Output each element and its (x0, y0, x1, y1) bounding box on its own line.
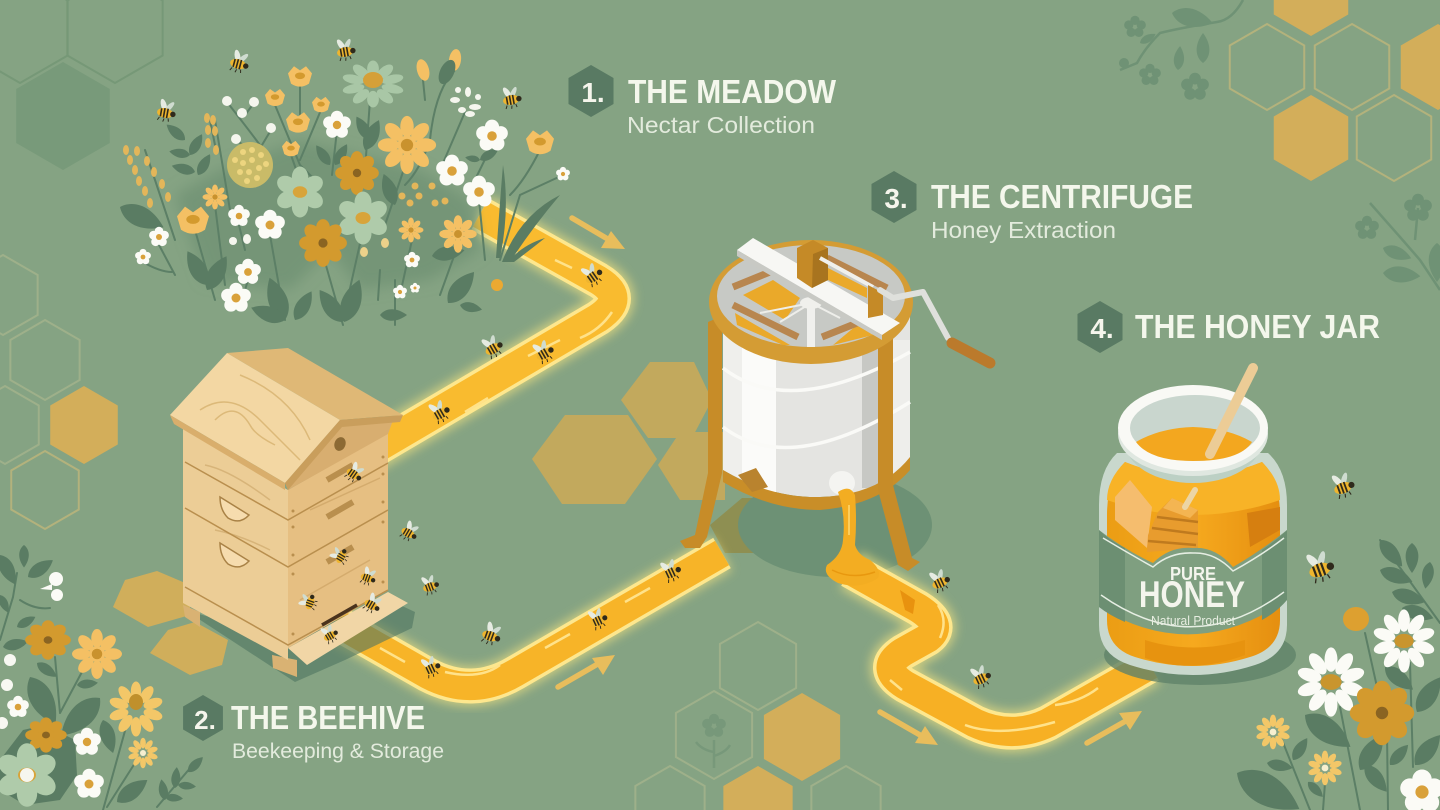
bottom left floral cluster (0, 545, 206, 810)
bar pivot block (797, 240, 883, 318)
arrow: stream direction 1 (572, 218, 625, 249)
badge 4: 4. (1090, 313, 1114, 344)
meadow flower patch (116, 48, 570, 327)
title: the centrifuge: THE CENTRIFUGE (931, 178, 1193, 215)
right cluster flower heads (1343, 607, 1369, 631)
meadow: grass blades over stream (502, 195, 560, 262)
meadow: leaves (116, 114, 560, 327)
hive box seams (185, 462, 388, 645)
honey stream: centrifuge to jar (850, 570, 1150, 732)
honey surface (1136, 427, 1252, 461)
jar honey (1107, 462, 1280, 666)
label text: honey: HONEY (1139, 574, 1245, 615)
honeycomb: bottom centre (635, 622, 881, 810)
left cluster white blossom (40, 572, 63, 601)
hive screws (292, 456, 384, 636)
centrifuge drum (723, 300, 910, 510)
badge 1: 1. (581, 77, 605, 108)
honeycomb: centre floor hexagons (532, 362, 798, 553)
jar label (1099, 530, 1287, 634)
honey pour (826, 489, 879, 586)
meadow: pale buds (360, 238, 389, 257)
hive legs (183, 605, 297, 677)
meadow: background grass (175, 140, 480, 290)
subtitle: honey extraction: Honey Extraction (931, 217, 1116, 243)
badge 3: 3. (884, 183, 908, 214)
step 2 heading (183, 695, 444, 763)
hive landing board (288, 592, 408, 665)
hive right face (288, 433, 388, 648)
title: the honey jar: THE HONEY JAR (1135, 308, 1380, 345)
silhouette foliage: right (1355, 194, 1440, 290)
meadow: yarrow cluster (227, 142, 273, 188)
hive hand holds (220, 465, 353, 567)
drum base band (723, 457, 910, 510)
drum hoops (723, 352, 910, 447)
bees (156, 36, 1358, 690)
badge 2 (183, 695, 223, 741)
badge 4 (1077, 301, 1123, 353)
left cluster leaves (0, 545, 206, 808)
right cluster stems (1282, 540, 1440, 810)
arrow: stream direction 2 (558, 655, 615, 687)
arrow: stream direction 4 (1087, 711, 1142, 743)
step 4 heading (1077, 301, 1380, 353)
title: the meadow: THE MEADOW (628, 73, 837, 110)
jar opening (1130, 395, 1260, 461)
honey dipper (1147, 490, 1198, 552)
centrifuge ground shadow (738, 473, 932, 577)
hive left face (183, 428, 288, 660)
honeycomb: top right (1230, 0, 1440, 181)
centrifuge inner frames (733, 258, 887, 347)
subtitle: nectar collection: Nectar Collection (627, 112, 815, 138)
step 3 heading (871, 171, 1193, 243)
honey stream: meadow to hive (370, 214, 613, 452)
centrifuge legs (680, 316, 920, 571)
hive roof (227, 348, 403, 420)
crank handle (880, 290, 990, 363)
jar neck (1125, 401, 1261, 483)
hive gable (285, 420, 393, 490)
dipper stick (1210, 368, 1253, 454)
honeycomb: top left (0, 0, 163, 170)
left cluster stems (0, 573, 197, 810)
silhouette foliage: top right (1119, 0, 1243, 100)
meadow: flower heads (135, 48, 570, 312)
honey stream: hive to centrifuge (335, 553, 722, 686)
silhouette flower in bottom hexagon (696, 714, 730, 768)
bottom right floral cluster (1229, 535, 1440, 810)
badge 3 (871, 171, 917, 223)
hive shadow (185, 598, 415, 682)
meadow: fallen petal (491, 279, 503, 291)
roof wood grain (200, 375, 310, 460)
centrifuge rim (709, 240, 913, 364)
jar glass (1099, 453, 1287, 675)
meadow: small white buds (222, 87, 481, 245)
label text: natural product: Natural Product (1151, 613, 1235, 628)
label text: pure: PURE (1170, 563, 1216, 584)
badge 2: 2. (194, 705, 216, 735)
beehive (170, 348, 415, 682)
centrifuge (680, 238, 990, 586)
right cluster leaves (1229, 535, 1440, 810)
honey jar (1099, 368, 1296, 685)
hive entrance (322, 605, 357, 625)
honeycomb: left edge (0, 255, 118, 529)
meadow: stems (143, 70, 563, 325)
title: the beehive: THE BEEHIVE (231, 699, 425, 736)
subtitle: beekeeping and storage: Beekeeping & Storage (232, 740, 444, 763)
centrifuge tap (829, 471, 855, 495)
centrifuge top bar (737, 238, 900, 335)
centrifuge gate (738, 468, 768, 492)
honeycomb: under hive (113, 571, 228, 675)
jar rim (1118, 392, 1268, 476)
step 1 heading (568, 65, 837, 138)
jar glass highlight (1115, 480, 1152, 548)
jar shadow (1104, 625, 1296, 685)
meadow: wheat sprigs (123, 113, 448, 208)
badge 1 (568, 65, 614, 117)
jar upper honey band (1107, 462, 1280, 515)
arrow: stream direction 3 (880, 712, 938, 745)
